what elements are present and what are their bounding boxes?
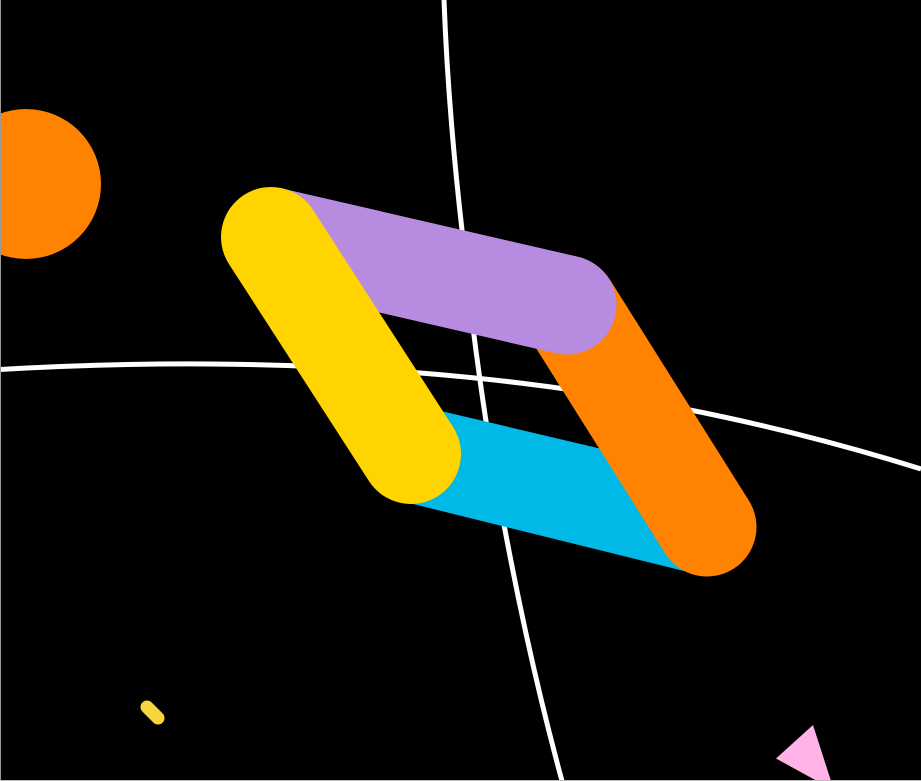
bar: yellow (271, 237, 411, 454)
canvas edge: left (0, 0, 1, 781)
circle: orange (0, 109, 101, 259)
small yellow dash (147, 707, 158, 718)
bar: blue (405, 411, 700, 575)
bar: orange (568, 306, 707, 527)
bar: purple (272, 237, 567, 305)
canvas edge: bottom (0, 780, 921, 781)
pink triangle (776, 725, 831, 781)
vertical white curve (444, 0, 562, 781)
horizontal white curve (0, 364, 921, 469)
